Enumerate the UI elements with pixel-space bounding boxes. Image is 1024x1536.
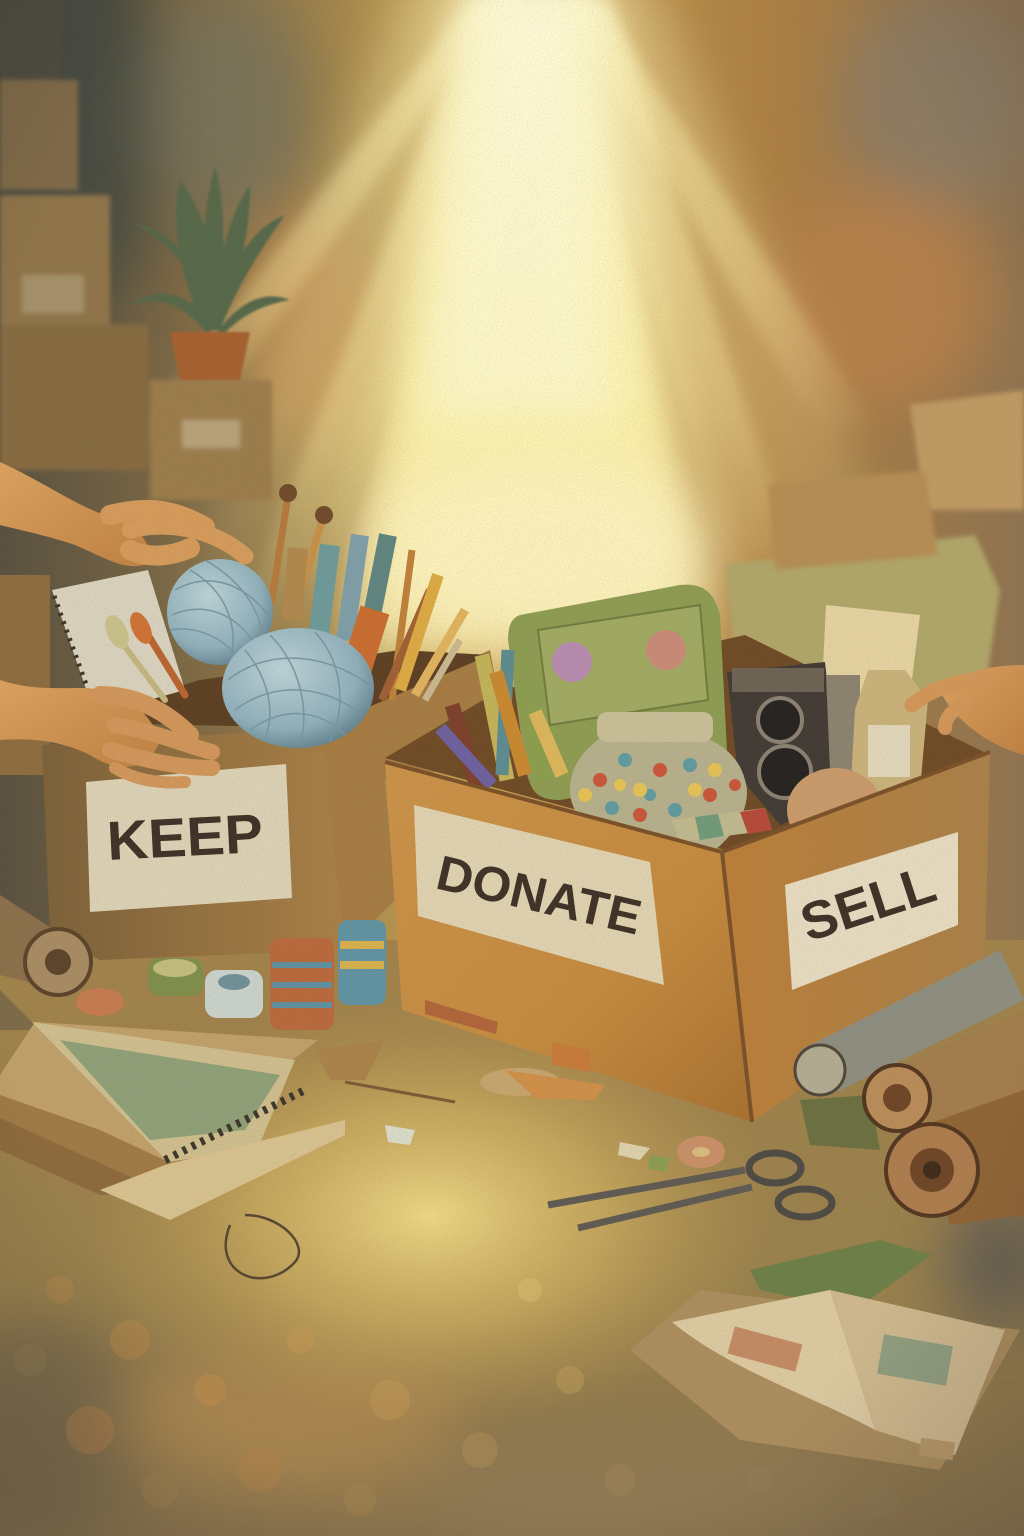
- floor: [0, 940, 1024, 1536]
- box: DONATE/SELL: [385, 585, 990, 1122]
- scissors: [548, 1153, 832, 1228]
- hand: right: [912, 665, 1024, 755]
- paper note: [820, 605, 920, 735]
- hand: lower left: [0, 680, 212, 782]
- pencils bundle: [440, 650, 562, 790]
- box right side: [722, 752, 990, 1122]
- background: stacked boxes right: [725, 390, 1024, 700]
- candy jar: [570, 712, 747, 850]
- twine ball: [787, 768, 883, 852]
- sell label: [785, 832, 958, 990]
- rolled papers right: [795, 950, 1024, 1225]
- box inner back: [385, 635, 990, 850]
- floor pebble: [919, 1438, 955, 1460]
- open book: [630, 1290, 1020, 1470]
- eraser block: [672, 808, 772, 842]
- keep box front panel: [42, 728, 345, 960]
- yarn ball large: [222, 628, 374, 748]
- tape rolls and spools: [76, 920, 386, 1030]
- box inner shadow: [60, 650, 490, 728]
- box front: [385, 762, 752, 1122]
- keep label: KEEP: [105, 802, 264, 872]
- background: stacked boxes left: [0, 0, 272, 500]
- keep box contents: [52, 484, 490, 748]
- sell label: SELL: [793, 855, 943, 953]
- knitting needles: [272, 484, 333, 600]
- pencils and tubes: [292, 535, 465, 700]
- notebook: [52, 570, 185, 715]
- keep label: [86, 764, 292, 912]
- box: KEEP: [0, 575, 510, 960]
- green notebook: [750, 1240, 932, 1310]
- box edges: [385, 752, 990, 1122]
- donate label: DONATE: [432, 846, 646, 946]
- bottles: [826, 670, 928, 800]
- keep box side panel: [320, 650, 510, 950]
- icon: flower stickers: [552, 642, 592, 682]
- box stamp: [425, 1000, 498, 1034]
- donate label: [414, 805, 664, 985]
- background wall: [0, 0, 1024, 1040]
- icon: potted plant: [130, 165, 290, 380]
- floor scraps: [315, 1040, 725, 1172]
- keep box left background crate: [0, 575, 50, 775]
- yarn ball small: [167, 559, 273, 665]
- box tab: [552, 1042, 590, 1072]
- floor glow: [80, 1000, 780, 1430]
- light rays: [130, 0, 940, 690]
- floor dapples: [14, 1276, 898, 1518]
- loose wire: [226, 1215, 299, 1278]
- notebooks stack: [0, 1022, 345, 1220]
- floor items: left rolls: [0, 895, 91, 1030]
- green case: [508, 585, 728, 800]
- vintage camera: [727, 662, 840, 825]
- hand: upper left: [0, 462, 245, 566]
- spoons and brushes: [100, 609, 185, 700]
